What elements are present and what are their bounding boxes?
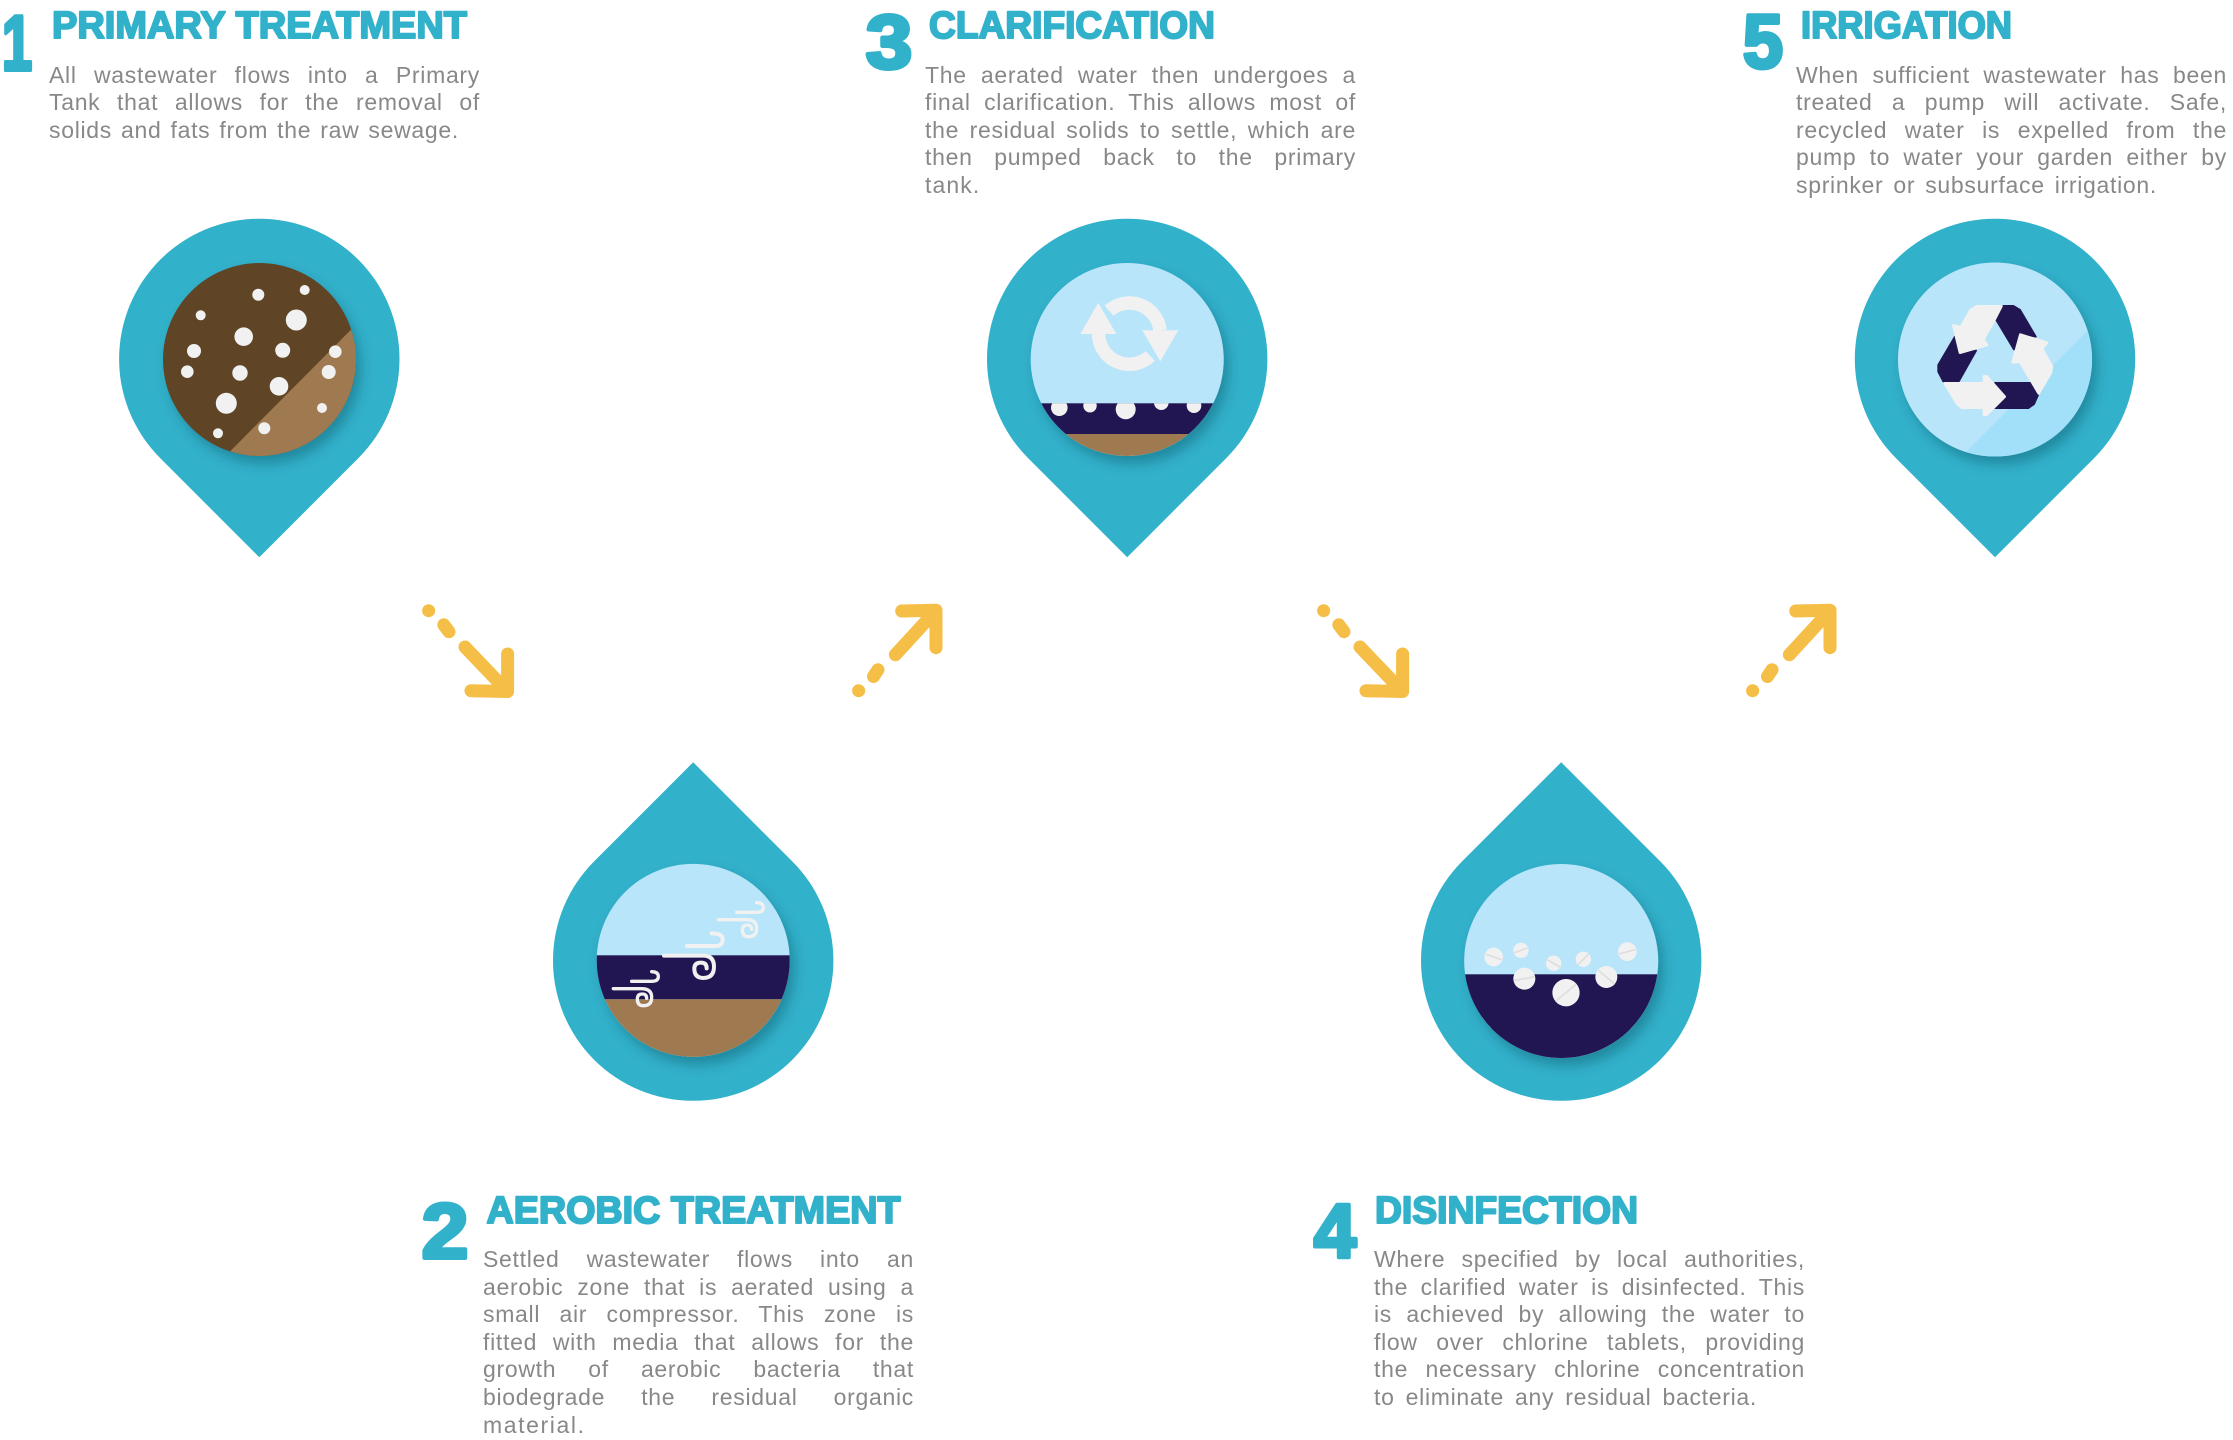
text: primary treatment description — [49, 62, 480, 143]
heading: disinfection: DISINFECTION — [1375, 1190, 1638, 1232]
text: disinfection description — [1374, 1246, 1805, 1410]
pin 2: aerobic treatment — [553, 762, 833, 1101]
text: aerobic treatment description — [483, 1246, 914, 1438]
number 3: 3 — [866, 0, 912, 84]
text: disinfection description: Where specified by local authorities, — [1374, 1246, 1805, 1272]
text: aerobic treatment description: material. — [483, 1412, 586, 1438]
text: irrigation description: When sufficient wastewater has been — [1796, 62, 2227, 88]
heading: irrigation: IRRIGATION — [1801, 5, 2012, 47]
arrow 4 to 5 — [1753, 610, 1830, 691]
icon: chlorine tablets — [1482, 940, 1639, 1012]
icon: recycling arrows — [1938, 306, 2052, 415]
heading: clarification: CLARIFICATION — [929, 5, 1215, 47]
text: primary treatment description: solids and fats from the raw sewage. — [49, 117, 459, 143]
number 5: 5 — [1743, 0, 1783, 84]
pin 5: irrigation — [1855, 219, 2135, 557]
heading: aerobic treatment: AEROBIC TREATMENT — [486, 1190, 900, 1232]
text: primary treatment description: Tank that allows for the removal of — [49, 89, 480, 115]
text: irrigation description — [1796, 62, 2227, 198]
text: aerobic treatment description: biodegrade the residual organic — [483, 1384, 914, 1410]
number 2: 2 — [422, 1189, 468, 1275]
text: clarification description: The aerated water then undergoes a — [925, 62, 1356, 88]
text: irrigation description: pump to water your garden either by — [1796, 144, 2227, 170]
heading: primary treatment: PRIMARY TREATMENT — [52, 5, 467, 47]
text: aerobic treatment description: growth of aerobic bacteria that — [483, 1356, 914, 1382]
text: irrigation description: recycled water is expelled from the — [1796, 117, 2227, 143]
icon: wind swirls — [613, 903, 763, 1006]
text: disinfection description: to eliminate any residual bacteria. — [1374, 1384, 1757, 1410]
arrow 3 to 4 — [1324, 611, 1403, 692]
settling bubbles — [1051, 403, 1202, 420]
text: disinfection description: flow over chlorine tablets, providing — [1374, 1329, 1805, 1355]
pin 4: disinfection — [1421, 762, 1701, 1101]
text: clarification description: final clarification. This allows most of — [925, 89, 1356, 115]
number 1: 1 — [2, 0, 32, 87]
solids particles — [181, 285, 342, 438]
pin 3: clarification — [987, 219, 1267, 557]
arrow 2 to 3 — [859, 610, 936, 691]
arrow 1 to 2 — [429, 611, 508, 692]
text: irrigation description: sprinker or subsurface irrigation. — [1796, 172, 2157, 198]
text: irrigation description: treated a pump will activate. Safe, — [1796, 89, 2227, 115]
text: disinfection description: the necessary chlorine concentration — [1374, 1356, 1805, 1382]
text: primary treatment description: All wastewater flows into a Primary — [49, 62, 480, 88]
icon: refresh arrows — [1080, 303, 1178, 364]
text: clarification description: then pumped back to the primary — [925, 144, 1356, 170]
text: clarification description: tank. — [925, 172, 980, 198]
text: aerobic treatment description: aerobic zone that is aerated using a — [483, 1274, 914, 1300]
text: aerobic treatment description: fitted with media that allows for the — [483, 1329, 914, 1355]
text: aerobic treatment description: Settled wastewater flows into an — [483, 1246, 914, 1272]
number 4: 4 — [1314, 1189, 1356, 1274]
text: clarification description — [925, 62, 1356, 198]
text: disinfection description: the clarified water is disinfected. This — [1374, 1274, 1805, 1300]
pin 1: primary treatment — [119, 219, 400, 557]
text: disinfection description: is achieved by allowing the water to — [1374, 1301, 1805, 1327]
text: clarification description: the residual solids to settle, which are — [925, 117, 1356, 143]
text: aerobic treatment description: small air compressor. This zone is — [483, 1301, 914, 1327]
